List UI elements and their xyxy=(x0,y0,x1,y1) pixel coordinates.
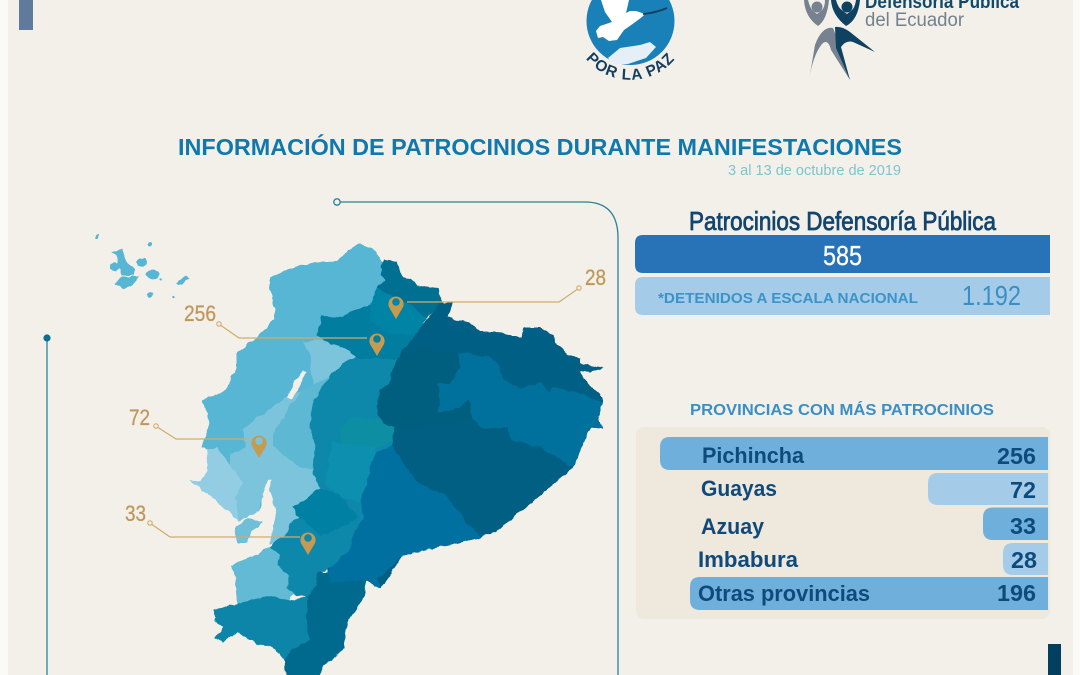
subtitle: dates: 3 al 13 de octubre de 2019 xyxy=(728,163,901,179)
region: Pichincha xyxy=(317,288,415,358)
region: Carchi xyxy=(378,260,442,317)
row: Imbabura xyxy=(698,543,1048,575)
region: Guayas river xyxy=(288,372,306,399)
row: Azuay: 33 xyxy=(1010,513,1036,539)
bottom-right decorative bar xyxy=(1048,644,1061,675)
region: Sucumbíos xyxy=(415,303,603,403)
callout: Imbabura 28: 28 xyxy=(585,265,606,290)
row: Otras provincias: 196 xyxy=(997,580,1036,606)
region: Tungurahua xyxy=(340,418,393,447)
detained bar: 1.192 xyxy=(635,277,1050,315)
region: Chimborazo xyxy=(325,443,377,503)
row: Guayas: 72 xyxy=(1010,477,1036,503)
region: Loja xyxy=(215,597,310,662)
title: INFORMACIÓN DE PATROCINIOS DURANTE MANIFESTACIONES xyxy=(178,133,902,160)
region: Orellana xyxy=(435,353,602,467)
callout: Guayas 72 xyxy=(129,405,267,458)
callout: Pichincha 256 xyxy=(184,301,385,356)
map of Ecuador xyxy=(95,234,603,675)
callout: Guayas 72: 72 xyxy=(129,405,150,430)
row: Imbabura: Imbabura xyxy=(698,547,799,572)
region: Guayas south xyxy=(268,467,322,543)
region: Morona Santiago xyxy=(328,445,480,587)
panel: provinces ranking xyxy=(636,427,1050,619)
row: Azuay: Azuay xyxy=(701,514,765,539)
row: Pichincha: Pichincha xyxy=(702,443,805,468)
map frame line xyxy=(334,199,618,675)
region: El Oro xyxy=(232,547,293,603)
region: Napo xyxy=(377,348,472,427)
region: Cañar xyxy=(293,488,358,535)
region: Sierra central xyxy=(270,358,397,597)
logo: por la paz: POR LA PAZ xyxy=(586,52,674,80)
row: Otras provincias xyxy=(690,577,1048,610)
left vertical line with dot xyxy=(43,334,51,675)
row: Otras provincias: Otras provincias xyxy=(698,581,870,606)
row: Guayas xyxy=(701,473,1048,505)
row: Azuay xyxy=(701,508,1048,540)
detained bar: 1.192: 1.192 xyxy=(962,280,1021,311)
row: Imbabura: 28 xyxy=(1011,547,1037,573)
heading: Patrocinios Defensoría Pública: Patrocinios Defensoría Pública xyxy=(689,206,996,236)
logo: defensoría pública: del Ecuador xyxy=(865,10,965,31)
row: Guayas: Guayas xyxy=(701,476,777,501)
region: Guayas north band xyxy=(230,393,300,520)
heading: provincias: PROVINCIAS CON MÁS PATROCINIOS xyxy=(690,402,994,419)
region: Imbabura xyxy=(370,288,427,335)
region: Zamora Chinchipe xyxy=(285,573,367,675)
callout: Imbabura 28 xyxy=(388,265,606,319)
region: Pastaza xyxy=(393,420,573,537)
detained bar: 1.192: *DETENIDOS A ESCALA NACIONAL xyxy=(658,291,918,307)
region: Galápagos xyxy=(95,234,189,298)
callout: Pichincha 256: 256 xyxy=(184,301,216,326)
callout: Azuay 33: 33 xyxy=(125,501,146,526)
region: Puná island xyxy=(236,519,262,543)
region: Santa Elena xyxy=(190,447,243,520)
region: Los Ríos xyxy=(273,377,330,470)
region: Esmeraldas and Manabí xyxy=(203,245,385,463)
top-left decorative bar xyxy=(19,0,33,30)
region: Guayas estuary xyxy=(262,479,273,513)
row: Pichincha xyxy=(660,437,1048,470)
logo: defensoría pública xyxy=(804,0,1019,80)
total bar: 585 xyxy=(635,235,1050,273)
region: Santo Domingo xyxy=(303,340,357,385)
row: Pichincha: 256 xyxy=(997,443,1036,469)
total bar: 585: 585 xyxy=(823,240,862,271)
callout: Azuay 33 xyxy=(125,501,316,555)
region: coast base xyxy=(190,245,385,543)
region: east base xyxy=(320,303,603,587)
logo: por la paz xyxy=(586,0,674,80)
